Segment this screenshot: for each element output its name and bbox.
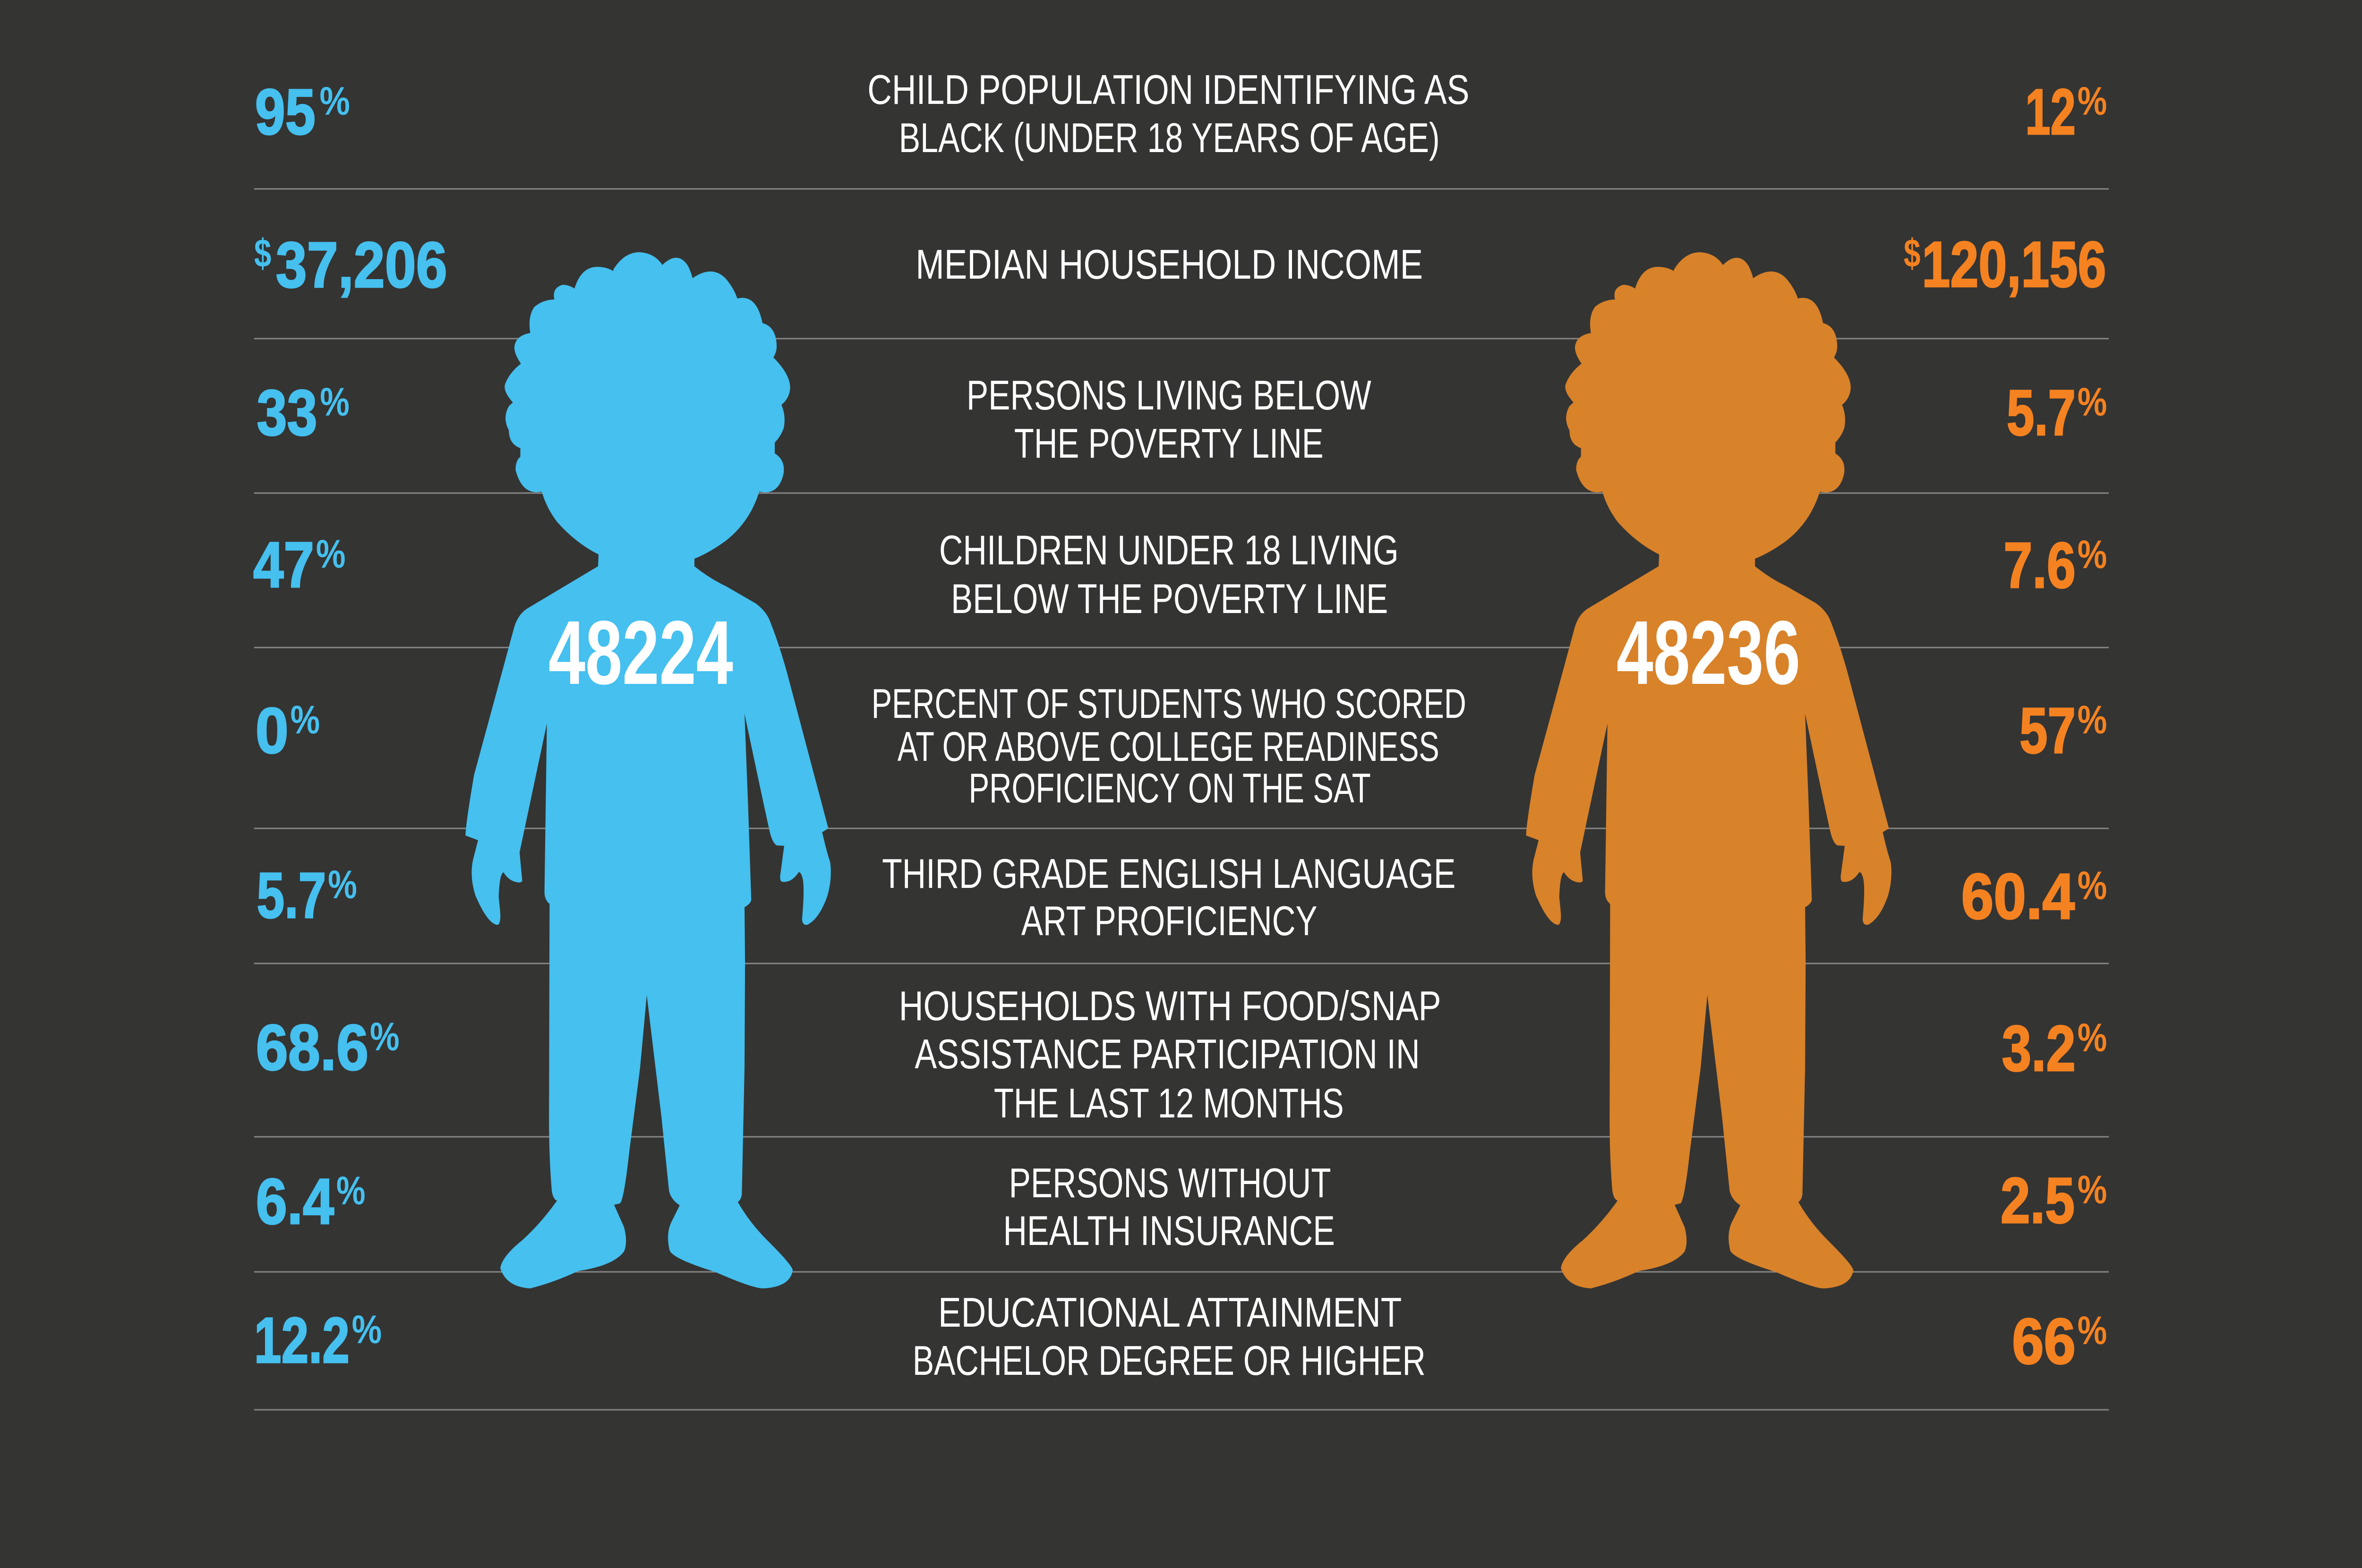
label: children in poverty: CHILDREN UNDER 18 LIVING <box>939 528 1399 574</box>
label: third grade ELA: ART PROFICIENCY <box>1021 898 1318 945</box>
label: educational attainment: BACHELOR DEGREE OR HIGHER <box>913 1338 1426 1384</box>
value: 5.7%: % <box>2078 380 2107 425</box>
label: third grade ELA: THIRD GRADE ENGLISH LANGUAGE <box>882 851 1455 897</box>
center column indicator labels <box>867 67 1469 1384</box>
label: persons in poverty: PERSONS LIVING BELOW <box>967 373 1371 419</box>
ZIP label 48224: 48224 <box>548 603 733 703</box>
label: no health insurance: HEALTH INSURANCE <box>1003 1208 1335 1254</box>
value: 5.7%: 5.7 <box>257 860 326 932</box>
value: 47%: 47 <box>253 529 314 601</box>
value: $37,206: $ <box>254 231 271 276</box>
value: 57%: 57 <box>2020 695 2076 767</box>
value: 2.5%: 2.5 <box>2001 1165 2075 1237</box>
value: $37,206: 37,206 <box>276 229 447 301</box>
value: 6.4%: % <box>336 1169 366 1213</box>
value: 2.5%: % <box>2078 1168 2107 1212</box>
value: 12%: 12 <box>2025 76 2076 148</box>
value: 68.6%: 68.6 <box>256 1012 368 1084</box>
label: SAT college readiness <box>872 681 1466 812</box>
label: children in poverty <box>939 528 1399 622</box>
value: 0%: 0 <box>256 695 289 767</box>
value: 60.4%: % <box>2078 864 2107 908</box>
label: food/SNAP assistance <box>899 983 1441 1127</box>
value: 5.7%: % <box>328 863 357 907</box>
value: 5.7%: 5.7 <box>2007 377 2076 449</box>
value: 7.6%: % <box>2078 533 2107 577</box>
value: 12%: % <box>2078 79 2107 124</box>
left column values for 48224 <box>253 76 447 1377</box>
label: educational attainment <box>913 1290 1426 1384</box>
value: 47%: % <box>316 532 346 577</box>
value: 0%: % <box>291 698 320 742</box>
label: SAT college readiness: PERCENT OF STUDENTS WHO SCORED <box>872 681 1466 727</box>
value: 60.4%: 60.4 <box>1961 861 2075 933</box>
label: educational attainment: EDUCATIONAL ATTAINMENT <box>938 1290 1402 1336</box>
label: persons in poverty <box>967 373 1371 467</box>
label: third grade ELA <box>882 851 1455 945</box>
label: median household income: MEDIAN HOUSEHOLD INCOME <box>916 242 1423 288</box>
value: 57%: % <box>2078 698 2107 742</box>
label: child population: BLACK (UNDER 18 YEARS OF AGE) <box>899 115 1440 162</box>
label: food/SNAP assistance: THE LAST 12 MONTHS <box>994 1081 1344 1127</box>
value: 7.6%: 7.6 <box>2003 529 2076 602</box>
value: 33%: % <box>320 380 350 425</box>
value: 12.2%: % <box>352 1308 382 1352</box>
value: 66%: 66 <box>2012 1305 2076 1378</box>
value: 95%: 95 <box>255 76 316 148</box>
label: no health insurance: PERSONS WITHOUT <box>1009 1160 1331 1207</box>
value: 3.2%: 3.2 <box>2002 1013 2076 1085</box>
value: $120,156: $ <box>1904 231 1920 276</box>
value: 68.6%: % <box>370 1015 400 1059</box>
value: 12.2%: 12.2 <box>254 1304 350 1377</box>
value: 66%: % <box>2078 1309 2107 1353</box>
ZIP label 48236: 48236 <box>1617 603 1800 703</box>
label: no health insurance <box>1003 1160 1335 1254</box>
orange child silhouette: ZIP 48236 <box>1526 252 1891 1288</box>
label: SAT college readiness: AT OR ABOVE COLLEGE READINESS <box>898 724 1439 770</box>
value: 6.4%: 6.4 <box>256 1166 334 1238</box>
blue child silhouette: ZIP 48224 <box>465 252 831 1288</box>
label: food/SNAP assistance: HOUSEHOLDS WITH FOOD/SNAP <box>899 983 1441 1030</box>
label: food/SNAP assistance: ASSISTANCE PARTICIPATION IN <box>915 1031 1420 1078</box>
value: 33%: 33 <box>257 377 317 449</box>
value: 95%: % <box>319 79 350 124</box>
value: $120,156: 120,156 <box>1922 229 2106 301</box>
right column values for 48236 <box>1904 76 2107 1378</box>
value: 3.2%: % <box>2078 1016 2107 1060</box>
label: children in poverty: BELOW THE POVERTY LINE <box>951 576 1388 622</box>
label: child population <box>867 67 1469 162</box>
label: SAT college readiness: PROFICIENCY ON THE SAT <box>969 766 1371 812</box>
label: child population: CHILD POPULATION IDENTIFYING AS <box>867 67 1469 113</box>
value: 0% <box>256 695 320 767</box>
label: persons in poverty: THE POVERTY LINE <box>1014 421 1324 467</box>
